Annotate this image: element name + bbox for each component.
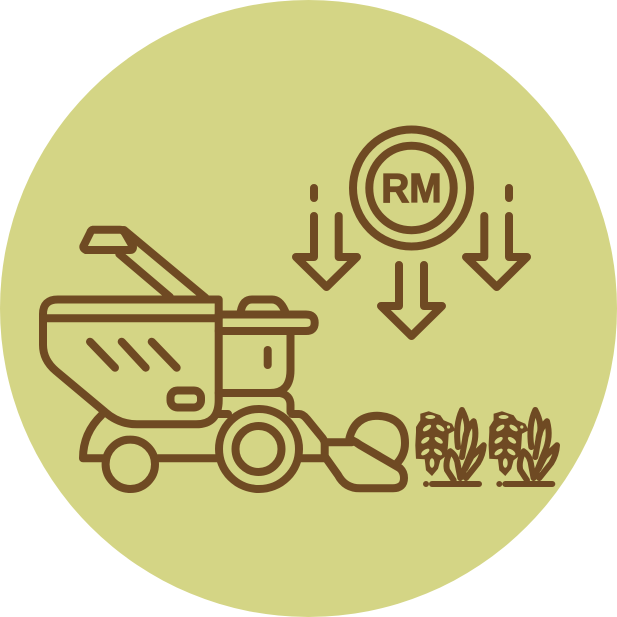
icon: RM coin [353, 130, 470, 246]
icon: combine harvester [43, 230, 405, 489]
arrow: centre down arrow [381, 265, 442, 336]
cab [219, 300, 315, 412]
grain spout [83, 230, 206, 298]
arrow: left down arrow [296, 188, 357, 287]
hopper body [43, 300, 219, 424]
ground line [426, 481, 479, 487]
leaves [446, 410, 484, 480]
wheat ear [415, 411, 455, 476]
harvester header [325, 416, 405, 488]
leaves [520, 410, 557, 480]
icon: right crop plant [489, 410, 557, 484]
rear wheel [106, 440, 155, 489]
arrow: right down arrow [466, 188, 527, 287]
wheat ear [489, 411, 529, 476]
chassis [83, 414, 325, 458]
coin label: RM [381, 165, 442, 211]
ground line [499, 481, 552, 487]
icon: left crop plant [415, 410, 484, 484]
front wheel [219, 409, 299, 489]
